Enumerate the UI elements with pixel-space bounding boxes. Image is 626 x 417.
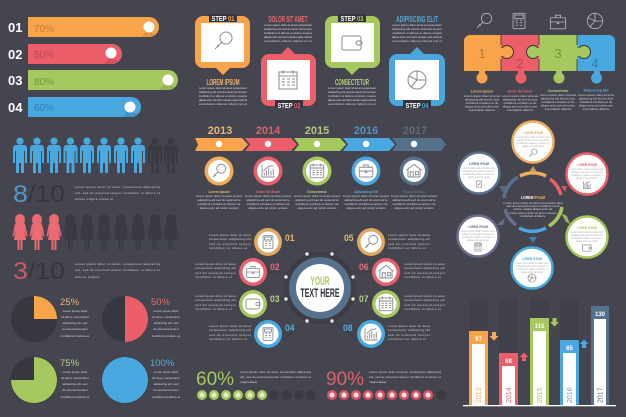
pie 25%: 25% <box>60 297 80 308</box>
bar 2015 <box>530 318 549 406</box>
puzzle icons <box>477 13 603 29</box>
puzzle labels: incididunt ut labore et do <box>466 101 499 105</box>
panel: 90 percent dots <box>326 369 446 400</box>
step 3: CONSECTETUR <box>335 78 369 87</box>
year labels: 2013 <box>208 125 232 137</box>
bubble left top <box>458 152 500 194</box>
bubble bottom: aliqua enim ad minim <box>521 272 543 274</box>
item 04: incididunt ut labore et <box>209 337 247 341</box>
milestone 2017: aliqua enim ad minim veniam <box>395 206 434 210</box>
bar 2017: 2017 <box>598 387 604 403</box>
bar 04: 04 <box>8 100 23 115</box>
bubble right bottom: incididunt ut labore et dolore m <box>571 237 603 240</box>
chart baseline <box>463 405 616 406</box>
panel: 90 percent dots: Lorem ipsum dolor sit amet, consectetur adipiscing <box>369 370 441 374</box>
pie 100%: do eiusmod tempor <box>153 388 179 392</box>
connector dots <box>284 252 355 323</box>
bubble left bottom: aliqua enim ad minim <box>467 240 489 242</box>
item 03: incididunt ut labore et <box>195 307 232 311</box>
pictogram: 8 of 10 men <box>13 138 178 208</box>
item 07: Lorem ipsum dolor sit amet <box>404 294 445 298</box>
pie 100%: Lorem ipsum dolor <box>154 370 178 374</box>
item 03: Lorem ipsum dolor sit amet <box>195 294 236 298</box>
puzzle labels: Lorem ipsum dolor sit amet <box>540 93 576 97</box>
item 08: Lorem ipsum dolor sit amet <box>388 324 430 328</box>
piece blue <box>577 35 615 84</box>
step 4: exercitation ullamco laboris nisi ut <box>392 39 442 43</box>
milestone 2017 <box>391 156 438 210</box>
item 02: incididunt ut labore et <box>195 275 232 279</box>
puzzle labels: Dolor Sit Amet <box>508 90 533 94</box>
puzzle labels: adipiscing elit sed do eius <box>465 98 500 102</box>
item 04 <box>209 320 295 348</box>
milestone 2014: incididunt ut labore et dolore ma <box>247 202 290 206</box>
bar 2014 <box>499 353 518 406</box>
puzzle labels: Lorem Ipsum <box>471 90 493 94</box>
puzzle labels: exercitation ullamco <box>583 107 610 111</box>
bubble left top: Lorem ipsum dolor sit amet cons <box>462 167 496 170</box>
bubble top: Lorem ipsum dolor sit amet cons <box>516 136 550 139</box>
item 06: incididunt ut labore et <box>404 275 441 279</box>
bubble top: adipiscing elit sed do eiusmod t <box>517 139 549 142</box>
milestone 2017: incididunt ut labore et dolore ma <box>393 202 436 206</box>
hub circle: YOUR <box>310 274 330 288</box>
item 04: consectetur adipiscing elit <box>209 328 251 332</box>
item 03 <box>195 290 280 318</box>
step 1: exercitation ullamco laboris nisi ut <box>199 102 247 106</box>
puzzle labels: Consectetur <box>548 89 569 93</box>
step 3: aliqua enim ad minim veniam quis nostrud <box>328 98 376 102</box>
ring centre text: LOREM IPSUM <box>521 195 545 200</box>
item 05: Lorem ipsum dolor sit amet <box>388 233 430 237</box>
item 05 <box>344 228 430 256</box>
pictogram: 3 of 10 women <box>12 214 178 285</box>
puzzle labels: exercitation ullamco <box>469 108 496 112</box>
milestone 2013: Lorem ipsum dolor sit amet consec <box>196 194 243 198</box>
milestone 2015: adipiscing elit sed do eiusmod te <box>295 198 339 202</box>
piece red <box>501 35 539 84</box>
step 3: exercitation ullamco laboris nisi ut <box>328 102 376 106</box>
bar 2016: 2016 <box>567 387 574 403</box>
pie 100% <box>102 356 180 404</box>
puzzle labels: exercitation ullamco <box>545 107 572 111</box>
puzzle labels <box>464 88 614 112</box>
step 2: adipiscing elit sed do eiusmod tempor <box>264 27 312 31</box>
bubble right top <box>566 154 608 194</box>
bar 2017: 130 <box>595 312 606 318</box>
item 05: 05 <box>344 233 354 244</box>
pictogram: 3 of 10 women: elit, sed do eiusmod tempor incididunt ut labore et <box>75 268 160 272</box>
puzzle labels: incididunt ut labore et do <box>504 101 537 105</box>
step 1: STEP 01 <box>212 14 234 23</box>
bar 04 <box>8 97 141 117</box>
panel: circular process <box>458 122 608 288</box>
milestone 2015 <box>294 156 341 210</box>
bubble top: incididunt ut labore et dolore m <box>517 142 549 145</box>
milestone 2016 <box>343 156 390 210</box>
piece orange <box>464 35 514 84</box>
piece numbers: 1 <box>478 46 486 61</box>
milestone 2014: aliqua enim ad minim veniam <box>249 206 288 210</box>
puzzle labels: Adipiscing Elit <box>584 88 609 92</box>
panel: 90 percent dots: 90% <box>326 369 364 390</box>
ring arrows <box>497 166 570 243</box>
milestone 2014: Lorem ipsum dolor sit amet consec <box>245 194 292 198</box>
milestone 2014: Dolor Sit Amet <box>256 190 281 194</box>
item 04: 04 <box>285 323 295 334</box>
bubble right top: aliqua enim ad minim <box>576 178 598 180</box>
milestone 2013: aliqua enim ad minim veniam <box>200 206 239 210</box>
pie 75% <box>10 356 89 404</box>
bar 01 <box>8 17 159 37</box>
pie 50%: do eiusmod tempor <box>153 327 179 331</box>
ring centre text: dolore magna aliqua enim ad <box>514 207 553 211</box>
item 02: sed do eiusmod tempor <box>195 271 236 275</box>
bubble left bottom: adipiscing elit sed do eiusmod t <box>462 233 494 236</box>
puzzle labels: aliqua enim ad minim ven <box>465 104 499 108</box>
milestone 2016: Lorem ipsum dolor sit amet consec <box>343 194 390 198</box>
bar 2015: 115 <box>535 324 545 330</box>
item 02: Lorem ipsum dolor sit amet <box>195 262 236 266</box>
bar 2015: 2015 <box>537 387 544 403</box>
step 2: Lorem ipsum dolor sit amet consectetur <box>264 23 312 27</box>
pie 100%: adipiscing elit, sed <box>154 382 179 386</box>
milestone 2017: Lorem ipsum dolor sit amet consec <box>391 194 438 198</box>
ring centre text: sed do eiusmod tempor incididunt ut lab <box>506 204 560 208</box>
pictogram: 8 of 10 men: dolore magna aliqua ut <box>75 197 113 201</box>
bubble right top: incididunt ut labore et dolore m <box>571 174 603 177</box>
bar 03 <box>8 70 178 90</box>
milestone 2016: incididunt ut labore et dolore ma <box>345 202 388 206</box>
bar 2013: 2013 <box>476 387 483 403</box>
pie 50%: adipiscing elit, sed <box>154 321 179 325</box>
year labels: 2014 <box>256 125 281 137</box>
pie 75%: do eiusmod tempor <box>62 388 88 392</box>
puzzle labels: aliqua enim ad minim ven <box>579 104 613 108</box>
puzzle labels: Lorem ipsum dolor sit amet <box>578 93 614 97</box>
bar 04: 60% <box>34 103 54 114</box>
step 1: aliqua enim ad minim veniam quis nostrud <box>199 98 247 102</box>
bar 2014: 2014 <box>506 387 513 403</box>
bubble right top: LOREM IPSUM <box>577 163 597 167</box>
pictogram: 3 of 10 women: 3/10 <box>13 258 65 285</box>
bubble left bottom: Lorem ipsum dolor sit amet cons <box>461 230 495 233</box>
pie 50% <box>102 296 180 342</box>
puzzle labels: Lorem ipsum dolor sit amet <box>502 94 538 98</box>
item 07: 07 <box>359 294 368 305</box>
bar 03: 80% <box>34 77 54 88</box>
ring segments <box>504 173 562 231</box>
bubble top: LOREM IPSUM <box>523 131 543 135</box>
bar 2016 <box>560 340 579 406</box>
pie 25%: sit amet, consectetur <box>61 315 89 319</box>
bar 2013 <box>469 331 488 406</box>
item 08 <box>343 320 430 348</box>
connector lines <box>267 236 372 340</box>
milestone 2016: Adipiscing Elit <box>354 190 379 194</box>
milestone 2013: Lorem Ipsum <box>208 190 230 194</box>
step 4: Lorem ipsum dolor sit amet consectetur <box>392 23 442 27</box>
puzzle labels: adipiscing elit sed do eius <box>541 96 576 100</box>
milestone 2017: adipiscing elit sed do eiusmod te <box>392 198 436 202</box>
bubble left top: adipiscing elit sed do eiusmod t <box>463 170 495 173</box>
bubble left top: LOREM IPSUM <box>469 162 489 166</box>
pie 75%: Lorem ipsum dolor <box>63 370 87 374</box>
step 2 <box>261 15 316 110</box>
ring centre text <box>503 195 563 218</box>
panel: 90 percent dots: magna aliqua <box>369 380 386 384</box>
step 3: adipiscing elit sed do eiusmod tempor <box>328 90 376 94</box>
item 02: consectetur adipiscing elit <box>195 266 236 270</box>
item 01: 01 <box>285 233 295 244</box>
puzzle labels: Lorem ipsum dolor sit amet <box>464 94 500 98</box>
pie 50%: incididunt ut labore et <box>152 334 180 338</box>
milestone 2016: aliqua enim ad minim veniam <box>347 206 386 210</box>
bubble bottom: incididunt ut labore et dolore m <box>516 268 548 271</box>
panel: 90 percent dots: elit, sed do eiusmod tempor incididunt ut labore et <box>369 375 441 379</box>
pie 100%: sit amet, consectetur <box>152 376 180 380</box>
bar 2017 <box>591 306 609 406</box>
pie 25%: Lorem ipsum dolor <box>63 309 87 313</box>
hub circle <box>284 252 356 324</box>
item 04: sed do eiusmod tempor <box>209 333 251 337</box>
milestone 2016: adipiscing elit sed do eiusmod te <box>344 198 388 202</box>
bubble bottom <box>512 248 552 288</box>
step 3: STEP 03 <box>340 14 364 23</box>
item 01: incididunt ut labore et <box>209 246 247 250</box>
bar 2014: 68 <box>505 359 512 365</box>
item 08: sed do eiusmod tempor <box>388 333 430 337</box>
item 05: incididunt ut labore et <box>388 246 426 250</box>
step 3: incididunt ut labore et dolore magna <box>328 94 376 98</box>
milestone 2015: aliqua enim ad minim veniam <box>298 206 337 210</box>
panel: progress bars <box>8 17 178 117</box>
step 1: incididunt ut labore et dolore magna <box>199 94 247 98</box>
pie 75%: incididunt ut labore et <box>61 395 89 399</box>
step 2: exercitation ullamco laboris nisi ut <box>264 39 312 43</box>
bubble left top: incididunt ut labore et dolore m <box>463 173 495 176</box>
step 2: STEP 02 <box>278 101 300 110</box>
puzzle labels: adipiscing elit sed do eius <box>579 96 614 100</box>
panel: 60 percent dots: elit, sed do eiusmod tempor incididunt ut labore et <box>240 375 311 379</box>
piece numbers: 4 <box>591 56 599 71</box>
piece numbers: 3 <box>554 46 562 61</box>
bar 02: 02 <box>8 47 22 62</box>
item 06: consectetur adipiscing elit <box>404 266 445 270</box>
panel: 60 percent dots: 60% <box>196 369 234 390</box>
step 2: DOLOR SIT AMET <box>268 15 308 24</box>
item 01: Lorem ipsum dolor sit amet <box>209 233 251 237</box>
bubble right bottom: adipiscing elit sed do eiusmod t <box>571 234 603 237</box>
hub circle: TEXT HERE <box>300 286 340 300</box>
panel: bar chart <box>463 299 616 406</box>
item 07: consectetur adipiscing elit <box>404 298 445 302</box>
pie 25%: do eiusmod tempor <box>62 327 88 331</box>
item 05: sed do eiusmod tempor <box>388 242 430 246</box>
pictogram: 3 of 10 women: dolore magna <box>75 275 99 279</box>
bubble right bottom <box>566 216 608 258</box>
item 03: 03 <box>270 294 280 305</box>
piece green <box>526 35 590 84</box>
panel: 60 percent dots: magna aliqua <box>240 380 257 384</box>
bubble left bottom: LOREM IPSUM <box>468 225 488 229</box>
puzzle labels: aliqua enim ad minim ven <box>503 104 537 108</box>
item 05: consectetur adipiscing elit <box>388 237 430 241</box>
item 07: sed do eiusmod tempor <box>404 303 445 307</box>
pie 50%: Lorem ipsum dolor <box>154 309 178 313</box>
item 08: consectetur adipiscing elit <box>388 328 430 332</box>
bubble right top: Lorem ipsum dolor sit amet cons <box>570 168 604 171</box>
bar 02: 50% <box>34 50 54 61</box>
bubble bottom: LOREM IPSUM <box>522 257 542 261</box>
pie 25% <box>11 296 89 342</box>
puzzle labels: adipiscing elit sed do eius <box>503 98 538 102</box>
ring centre text: Lorem ipsum dolor sit amet consectetur adip <box>503 201 563 205</box>
panel: 60 percent dots <box>196 369 316 400</box>
step 4: aliqua enim ad minim veniam quis nostrud <box>392 35 442 39</box>
item 01 <box>209 228 295 256</box>
bubble top <box>512 122 554 162</box>
step 4: incididunt ut labore et dolore magna <box>392 31 442 35</box>
bubble left bottom: incididunt ut labore et dolore m <box>462 236 494 239</box>
pie 100%: incididunt ut labore et <box>152 395 180 399</box>
item 07 <box>359 290 445 318</box>
milestone 2015: Lorem ipsum dolor sit amet consec <box>294 194 341 198</box>
step 4: ADIPISCING ELIT <box>396 15 438 24</box>
piece numbers: 2 <box>516 56 524 71</box>
item 06 <box>359 258 445 286</box>
pie 100%: 100% <box>150 358 175 369</box>
item 02 <box>195 258 280 286</box>
bubble left top: aliqua enim ad minim <box>468 177 490 179</box>
milestone 2014 <box>245 156 292 210</box>
milestone 2015: incididunt ut labore et dolore ma <box>296 202 339 206</box>
bar 2013: 97 <box>475 337 482 343</box>
piece numbers <box>478 46 599 71</box>
bubble right bottom: aliqua enim ad minim <box>576 241 598 243</box>
panel: 60 percent dots: Lorem ipsum dolor sit amet, consectetur adipiscing <box>240 370 311 374</box>
item 03: sed do eiusmod tempor <box>195 303 236 307</box>
step 1 <box>195 14 250 106</box>
puzzle labels: incididunt ut labore et do <box>580 100 613 104</box>
item 02: 02 <box>270 262 280 273</box>
pie 50%: 50% <box>151 297 171 308</box>
step 1: adipiscing elit sed do eiusmod tempor <box>199 90 247 94</box>
item 07: incididunt ut labore et <box>404 307 441 311</box>
ring centre text: incididunt ut labore <box>520 214 546 218</box>
milestone 2017: Magna Aliqua <box>403 190 425 194</box>
trend arrows <box>490 318 588 361</box>
bubble bottom: Lorem ipsum dolor sit amet cons <box>515 262 549 265</box>
step 3: Lorem ipsum dolor sit amet consectetur <box>328 86 376 90</box>
pictogram: 8 of 10 men: elit, sed do eiusmod tempor incididunt ut labore et <box>75 191 160 195</box>
pie 75%: sit amet, consectetur <box>61 376 89 380</box>
pie 75%: 75% <box>60 358 80 369</box>
bubble right top: adipiscing elit sed do eiusmod t <box>571 171 603 174</box>
column tracks <box>469 299 579 406</box>
pictogram: 8 of 10 men: 8/10 <box>13 181 65 208</box>
milestone 2013 <box>196 156 243 210</box>
bar 03: 03 <box>8 73 22 88</box>
bubble bottom: adipiscing elit sed do eiusmod t <box>516 265 548 268</box>
item 04: Lorem ipsum dolor sit amet <box>209 324 251 328</box>
bubble top: aliqua enim ad minim <box>522 146 544 148</box>
item 01: sed do eiusmod tempor <box>209 242 251 246</box>
milestone 2015: Consectetur <box>307 190 328 194</box>
pictogram: 3 of 10 women: Lorem ipsum dolor sit amet, consectetur adipiscing <box>75 262 160 266</box>
pictogram: 8 of 10 men: Lorem ipsum dolor sit amet, consectetur adipiscing <box>75 185 160 189</box>
year labels: 2015 <box>305 125 329 137</box>
pie 75%: adipiscing elit, sed <box>63 382 88 386</box>
bar 02 <box>8 44 122 64</box>
item 08: 08 <box>343 323 352 334</box>
item 06: 06 <box>359 262 368 273</box>
puzzle labels: aliqua enim ad minim ven <box>541 104 575 108</box>
puzzle labels: exercitation ullamco <box>507 108 534 112</box>
item 03: consectetur adipiscing elit <box>195 298 236 302</box>
step 2: aliqua enim ad minim veniam quis nostrud <box>264 35 312 39</box>
item 06: Lorem ipsum dolor sit amet <box>404 262 445 266</box>
bubble left bottom <box>458 216 498 256</box>
arrow band <box>195 138 446 151</box>
step 4: STEP 04 <box>406 101 429 110</box>
panel: timeline <box>195 125 446 210</box>
step 3 <box>325 14 380 106</box>
milestone 2013: incididunt ut labore et dolore ma <box>198 202 241 206</box>
seams <box>501 35 577 71</box>
panel: radial hub <box>195 228 445 348</box>
bar 01: 01 <box>8 20 22 35</box>
puzzle labels: incididunt ut labore et do <box>542 100 575 104</box>
milestone 2014: adipiscing elit sed do eiusmod te <box>246 198 290 202</box>
bubble right bottom: LOREM IPSUM <box>577 226 597 230</box>
bar 2016: 85 <box>566 346 573 352</box>
step 2: incididunt ut labore et dolore magna <box>264 31 312 35</box>
bubble right bottom: Lorem ipsum dolor sit amet cons <box>570 231 604 234</box>
milestone 2013: adipiscing elit sed do eiusmod te <box>197 198 241 202</box>
pie 50%: sit amet, consectetur <box>152 315 180 319</box>
panel: pie charts <box>10 296 180 404</box>
year labels <box>208 125 427 137</box>
step 4: adipiscing elit sed do eiusmod tempor <box>392 27 442 31</box>
panel: puzzle <box>464 13 615 112</box>
panel: four steps <box>195 14 445 110</box>
year labels: 2016 <box>354 125 378 137</box>
step 1: Lorem ipsum dolor sit amet consectetur <box>199 86 247 90</box>
item 06: sed do eiusmod tempor <box>404 271 445 275</box>
step 4 <box>389 15 445 110</box>
item 08: incididunt ut labore et <box>388 337 426 341</box>
item 01: consectetur adipiscing elit <box>209 237 251 241</box>
ring centre text: Lorem ipsum dolor sit amet consect <box>509 211 557 215</box>
pie 25%: incididunt ut labore et <box>61 334 89 338</box>
year labels: 2017 <box>403 125 427 137</box>
step 1: LOREM IPSUM <box>206 78 240 87</box>
bar 01: 70% <box>34 24 54 35</box>
pie 25%: adipiscing elit, sed <box>63 321 88 325</box>
